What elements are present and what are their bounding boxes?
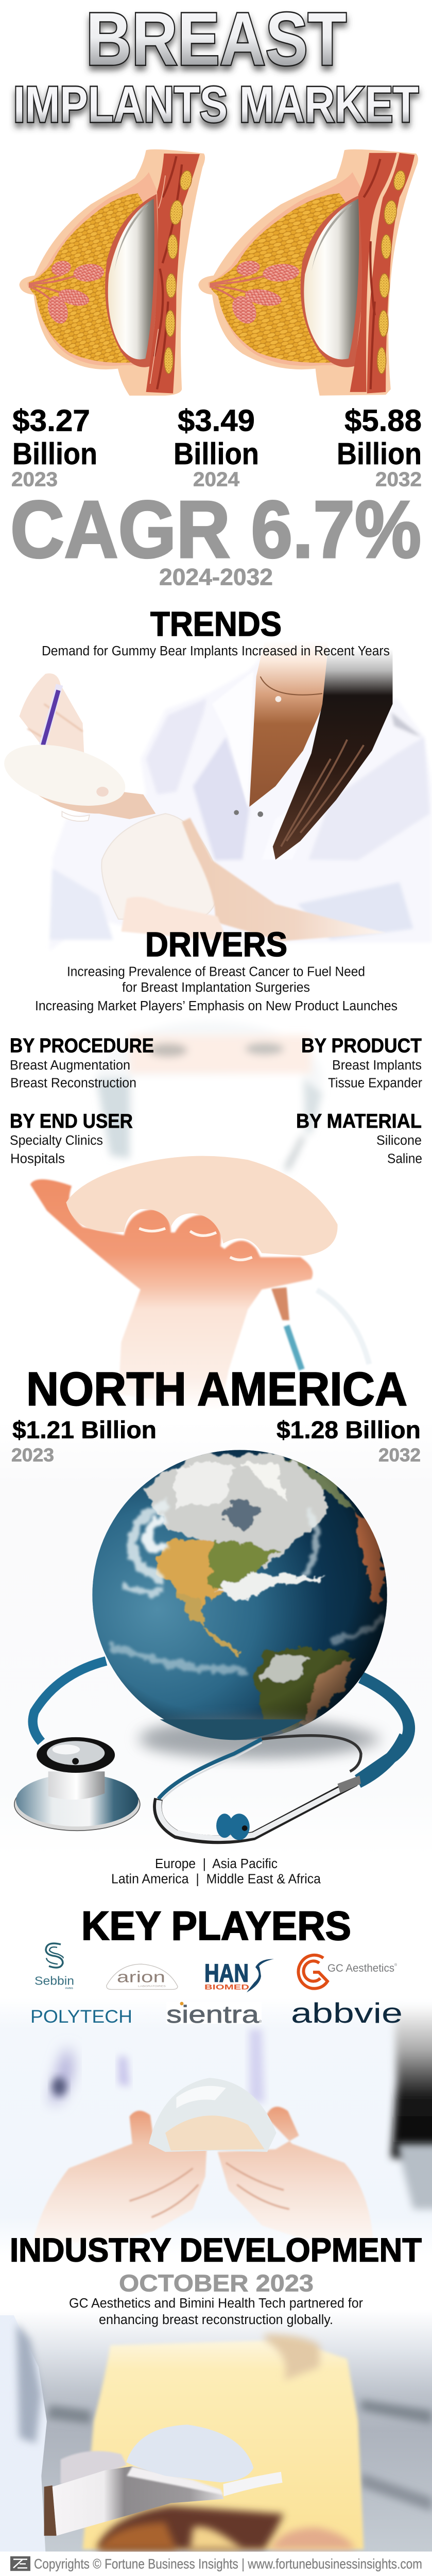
right hand (218, 2107, 373, 2242)
logo: Sientra: sientra (166, 2002, 260, 2028)
stat: 2024 market size: Billion (174, 437, 259, 471)
logo: Sebbin: Sebbin (34, 1974, 74, 1988)
text: development date: OCTOBER 2023 (119, 2270, 314, 2296)
segment: by end user: Hospitals (10, 1152, 65, 1166)
segment: by procedure (10, 1035, 154, 1090)
logo: Sientra: ® (259, 2020, 262, 2024)
segment: by end user: Specialty Clinics (10, 1133, 103, 1148)
left hand (33, 2111, 206, 2243)
logo: Hans Biomed (204, 1959, 274, 1992)
segment: by material (296, 1110, 422, 1166)
photo: doctor holding implants (0, 641, 432, 951)
stat: 2023 market size: 2023 (11, 468, 58, 490)
stat: north america 2032 (277, 1417, 421, 1466)
CAGR period: 2024-2032 (159, 564, 273, 590)
segment: by end user (10, 1110, 133, 1166)
forearm and hand (30, 1179, 313, 1411)
segment: by product: Breast Implants (332, 1058, 422, 1073)
segment: by procedure: Breast Reconstruction (10, 1076, 136, 1090)
white coat (0, 2315, 47, 2552)
text: other regions (111, 1857, 321, 1886)
illustration: breast implant anatomy, left (19, 149, 205, 396)
heading: north america: NORTH AMERICA (26, 1363, 407, 1416)
segment: by procedure: BY PROCEDURE (10, 1035, 154, 1057)
logo: Polytech: POLYTECH (30, 2006, 132, 2027)
segment: by product: Tissue Expander (328, 1076, 422, 1090)
chestpiece (14, 1778, 140, 1831)
photo: hands holding clear implant (0, 1997, 432, 2256)
logo: GC Aesthetics: ® (394, 1963, 397, 1967)
logo: Arion: LABORATOIRES (138, 1985, 166, 1988)
segment: by material: Silicone (376, 1133, 422, 1148)
logo: Hans Biomed: HAN (204, 1959, 249, 1988)
background: globe backdrop (0, 1421, 432, 1856)
silicone implant (66, 1156, 338, 1256)
photo: surgeon presenting implant (30, 1022, 369, 1411)
stat: 2032 market size (337, 403, 422, 490)
text: other regions: Latin America | Middle East & Africa (111, 1872, 321, 1886)
illustration: breast implant anatomy, right (198, 149, 418, 396)
segment: by procedure: Breast Augmentation (10, 1058, 130, 1073)
stat: north america 2023: 2023 (11, 1445, 54, 1466)
segment: by end user: BY END USER (10, 1110, 133, 1132)
text: driver one: for Breast Implantation Surgeries (122, 980, 310, 995)
stat: 2023 market size: Billion (12, 437, 97, 471)
globe (92, 1450, 387, 1740)
round implant and hand (101, 814, 386, 941)
segment: by material: BY MATERIAL (296, 1110, 422, 1132)
heading: trends: TRENDS (150, 605, 282, 643)
stat: 2023 market size (11, 403, 97, 490)
stat: 2023 market size: $3.27 (12, 403, 90, 437)
stat: 2032 market size: $5.88 (344, 403, 422, 437)
faded surgeon (96, 1022, 322, 1170)
stat: north america 2032: 2032 (378, 1445, 421, 1466)
text: development description (69, 2296, 363, 2327)
stat: north america 2032: $1.28 Billion (277, 1417, 421, 1444)
ear tips (216, 1814, 250, 1840)
logo: Hans Biomed: BIOMED (204, 1983, 249, 1991)
logo: Arion: arion (117, 1968, 165, 1986)
logo: Sebbin (34, 1943, 74, 1990)
hair (273, 649, 393, 860)
implant (126, 2425, 253, 2482)
logo: Sebbin: PARIS (65, 1987, 74, 1990)
stat: north america 2023: $1.21 Billion (12, 1417, 157, 1444)
glove (61, 2451, 127, 2484)
segment: by material: Saline (387, 1152, 422, 1166)
hand with pen (19, 673, 84, 753)
stat: 2032 market size: Billion (337, 437, 422, 471)
implant on palm (0, 734, 155, 821)
clear implant dome (149, 2078, 277, 2152)
coat and stethoscope (271, 1287, 369, 1369)
text: development description: enhancing breast reconstruction globally. (99, 2313, 333, 2327)
dark hands behind (96, 2506, 355, 2549)
text: driver two: Increasing Market Players’ Emphasis on New Product Launches (35, 999, 398, 1013)
finger creases (129, 2163, 289, 2217)
stat: north america 2023 (11, 1417, 157, 1466)
binaural tubes (158, 1736, 405, 1840)
text: other regions: Europe | Asia Pacific (155, 1857, 278, 1871)
title (13, 0, 419, 132)
logo: Arion (107, 1964, 178, 1989)
stat: 2024 market size: $3.49 (178, 403, 255, 437)
text: development description: GC Aesthetics and Bimini Health Tech partnered for (69, 2296, 363, 2311)
icon: Fortune Business Insights logo (10, 2556, 30, 2571)
footer (0, 2552, 432, 2576)
stat: 2024 market size (174, 403, 259, 490)
text: driver one (67, 965, 365, 995)
text: driver one: Increasing Prevalence of Breast Cancer to Fuel Need (67, 965, 365, 979)
stat: 2032 market size: 2032 (375, 468, 422, 490)
segment: by product (301, 1035, 422, 1090)
yellow shirt (83, 2340, 364, 2549)
text: trend statement: Demand for Gummy Bear Implants Increased in Recent Years (42, 644, 390, 658)
heading: key players: KEY PLAYERS (81, 1903, 351, 1948)
logo: GC Aesthetics (298, 1955, 397, 1989)
stat: 2024 market size: 2024 (193, 468, 239, 490)
stethoscope chestpiece and binaurals (14, 1719, 405, 1840)
photo: globe on stethoscope (33, 1450, 409, 1780)
photo: gloved hand holding implant (0, 2310, 432, 2552)
stethoscope tubing (33, 1661, 409, 1780)
heading: drivers: DRIVERS (145, 926, 287, 964)
logo: GC Aesthetics: GC Aesthetics (327, 1961, 394, 1974)
logo: AbbVie: abbvie (291, 1997, 403, 2029)
